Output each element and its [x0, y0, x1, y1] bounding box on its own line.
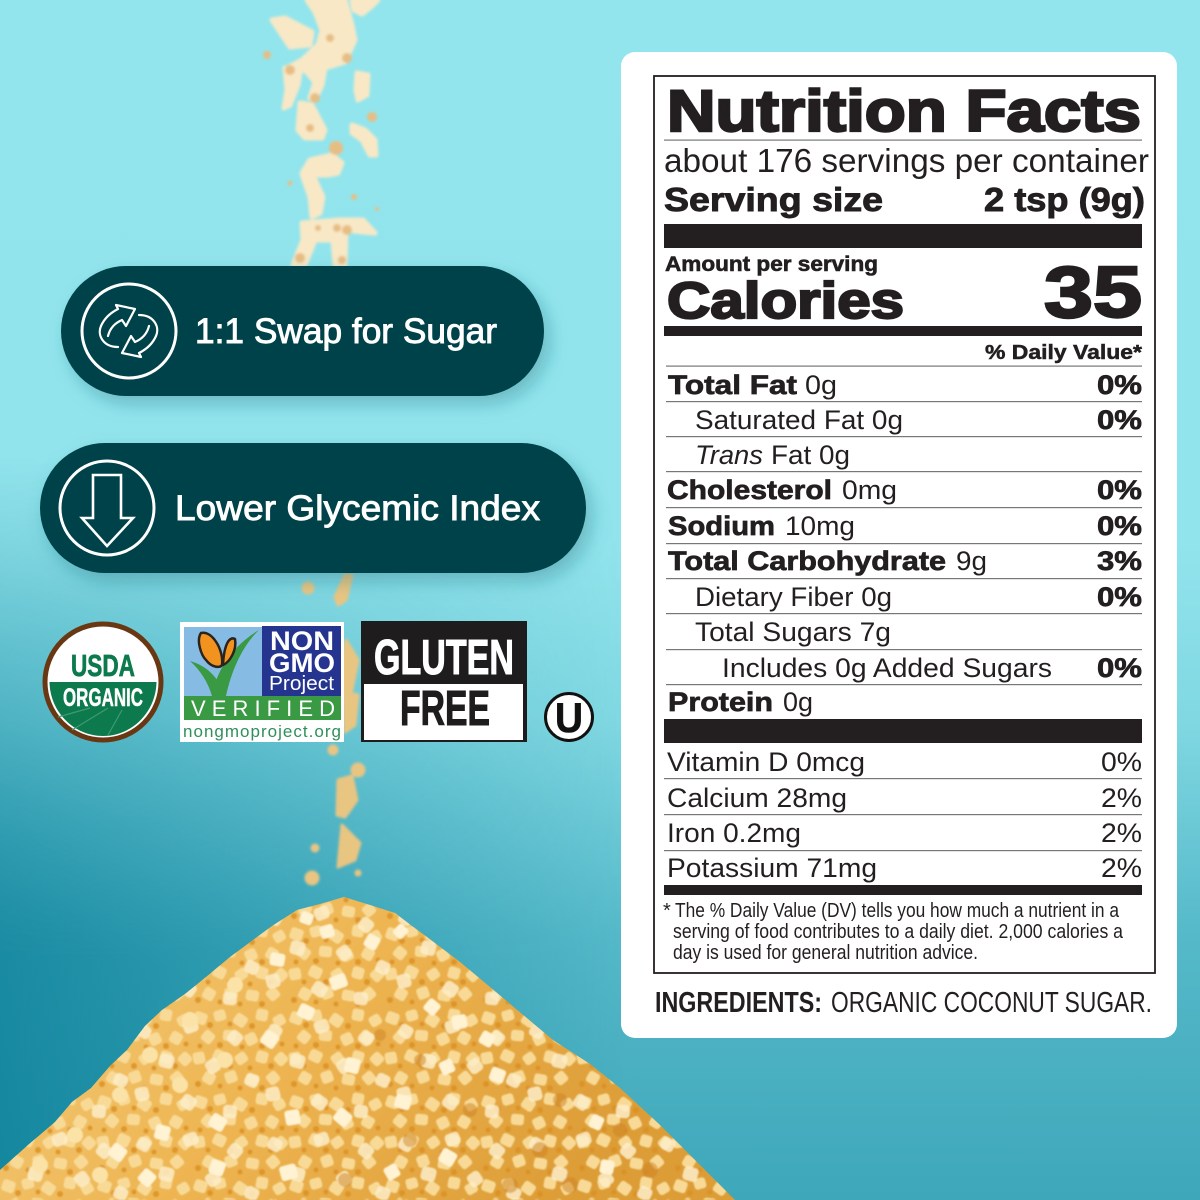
heading: nutrition facts: Nutrition Facts — [667, 79, 1141, 144]
nutrient rows: Dietary Fiber 0g — [695, 582, 892, 612]
vitamin rows: Vitamin D 0mcg — [667, 747, 865, 777]
badge: Non-GMO Project verified — [180, 622, 344, 742]
nutrient rows: 3% — [1097, 546, 1142, 576]
footnote — [663, 900, 1124, 964]
badge: kosher U: U — [555, 694, 583, 741]
nutrient rows: Cholesterol — [667, 475, 832, 505]
vitamin rows: 2% — [1101, 853, 1142, 883]
nutrient rows: Includes 0g Added Sugars — [722, 653, 1052, 683]
badge: Non-GMO Project verified: NON — [270, 626, 334, 656]
nutrient rows: 0% — [1097, 582, 1142, 612]
badge: Non-GMO Project verified: GMO — [269, 648, 335, 678]
nutrient rows: Sodium — [668, 511, 775, 541]
calories block: 35 — [1044, 253, 1142, 333]
footnote: serving of food contributes to a daily diet. 2,000 calories a — [673, 921, 1124, 943]
nutrient rows: 0g — [783, 687, 813, 717]
nutrient rows: 0% — [1097, 653, 1142, 683]
nutrient rows: Protein — [668, 687, 773, 717]
footnote: The % Daily Value (DV) tells you how much a nutrient in a — [675, 900, 1120, 922]
badge: gluten free: GLUTEN — [374, 631, 514, 685]
nutrient rows: Total Sugars 7g — [695, 617, 891, 647]
badge: Non-GMO Project verified: VERIFIED — [191, 696, 335, 721]
servings block: about 176 servings per container — [664, 142, 1149, 179]
pill: lower glycemic index — [40, 443, 586, 573]
icon: swap arrows — [82, 284, 176, 378]
vitamin rows: 0% — [1101, 747, 1142, 777]
nutrient rows: 0% — [1097, 370, 1142, 400]
icon: butterfly — [199, 633, 235, 667]
badge: gluten free: FREE — [400, 682, 490, 736]
calories block: Calories — [667, 272, 904, 329]
nutrient rows: 0% — [1097, 511, 1142, 541]
servings block: 2 tsp (9g) — [984, 181, 1145, 218]
pill: lower glycemic index: Lower Glycemic Index — [175, 489, 541, 528]
badge: USDA organic: USDA — [71, 648, 135, 683]
nutrient rows: 0% — [1097, 475, 1142, 505]
pill: 1:1 swap for sugar — [61, 266, 544, 396]
badge: Non-GMO Project verified: nongmoproject.org — [183, 722, 341, 741]
vitamin rows: Potassium 71mg — [667, 853, 877, 883]
servings block: Serving size — [664, 181, 883, 218]
falling sugar stream, lower — [303, 575, 364, 884]
nutrient rows — [664, 366, 1142, 743]
panel: nutrition card — [621, 52, 1177, 1038]
falling sugar stream, upper — [263, 0, 379, 265]
servings block — [664, 140, 1149, 248]
calories block: Amount per serving — [665, 253, 878, 276]
vitamin rows: Calcium 28mg — [667, 783, 847, 813]
label border — [654, 76, 1155, 973]
pill: 1:1 swap for sugar: 1:1 Swap for Sugar — [195, 312, 497, 351]
badge: kosher U — [546, 694, 592, 741]
calories block — [664, 253, 1142, 364]
icon: leaves — [190, 630, 259, 696]
ingredients — [655, 987, 1152, 1019]
nutrient rows: Total Fat — [668, 370, 797, 400]
badge: Non-GMO Project verified: Project — [269, 673, 334, 695]
vitamin rows — [664, 747, 1142, 895]
icon: down arrow — [60, 461, 154, 555]
nutrient rows: 0% — [1097, 405, 1142, 435]
calories block: % Daily Value* — [985, 342, 1142, 364]
nutrient rows: 0g — [805, 370, 837, 400]
footnote: day is used for general nutrition advice. — [673, 942, 978, 964]
ingredients: INGREDIENTS: — [655, 987, 822, 1019]
badge: USDA organic — [45, 624, 161, 740]
vitamin rows: 2% — [1101, 818, 1142, 848]
vitamin rows: Iron 0.2mg — [667, 818, 801, 848]
badge: USDA organic: ORGANIC — [63, 684, 143, 712]
nutrient rows: Total Carbohydrate — [668, 546, 946, 576]
sugar pile — [0, 890, 740, 1200]
nutrient rows: Fat 0g — [771, 440, 850, 470]
nutrient rows: 9g — [956, 546, 987, 576]
vitamin rows: 2% — [1101, 783, 1142, 813]
footnote: * — [663, 900, 671, 922]
nutrient rows: Saturated Fat 0g — [695, 405, 903, 435]
nutrient rows: 10mg — [785, 511, 855, 541]
badge: gluten free — [361, 621, 527, 742]
nutrient rows: 0mg — [842, 475, 897, 505]
nutrient rows: Trans — [695, 440, 763, 470]
